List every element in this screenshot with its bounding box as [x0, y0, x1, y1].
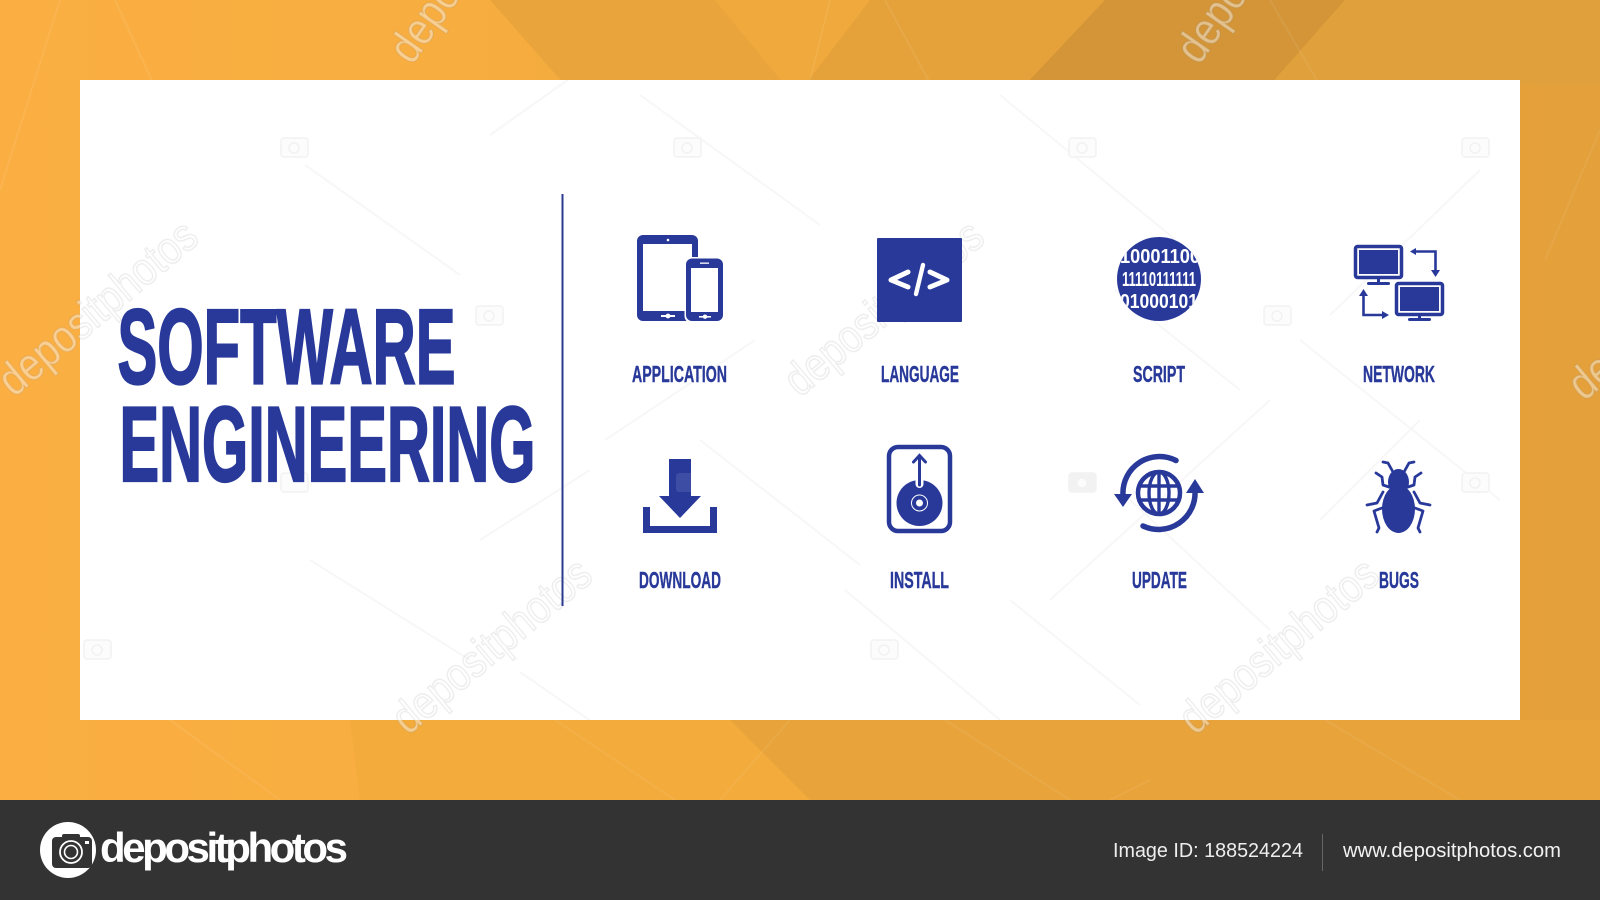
logo: depositphotos [40, 822, 348, 878]
icon: application devices [637, 235, 724, 323]
icon: script binary circle: 11110111111 [1122, 269, 1196, 291]
label: script: SCRIPT [1133, 361, 1185, 387]
title: ENGINEERING [120, 384, 536, 504]
footer bar [0, 800, 1600, 900]
label: language: LANGUAGE [881, 361, 959, 387]
title [118, 286, 536, 504]
icon: install disk [889, 447, 950, 531]
icon: script binary circle: 10001100 [1120, 246, 1200, 268]
watermark text: depositphotos [773, 209, 993, 406]
logo: depositphotos: depositphotos [100, 824, 348, 871]
divider [562, 194, 564, 606]
white panel [80, 80, 1520, 720]
website: www.depositphotos.com [1342, 839, 1561, 862]
icon: network computers [1356, 246, 1442, 321]
label: network: NETWORK [1363, 361, 1435, 387]
watermark text: depositphotos [1168, 547, 1388, 744]
icon: script binary circle: 01000101 [1120, 291, 1198, 313]
title: SOFTWARE [118, 286, 456, 406]
watermark cameras [84, 138, 1489, 659]
label: update: UPDATE [1132, 567, 1187, 593]
label: bugs: BUGS [1379, 567, 1419, 593]
label: application: APPLICATION [632, 361, 727, 387]
image id: Image ID: 188524224 [1113, 839, 1303, 862]
watermark text: depositphotos [381, 547, 601, 744]
icon: script binary circle [1117, 237, 1201, 321]
icon: download arrow tray [643, 459, 717, 533]
icon: bug [1367, 462, 1430, 533]
label: download: DOWNLOAD [639, 567, 721, 593]
label: install: INSTALL [890, 567, 949, 593]
icon: language code square [877, 238, 962, 322]
icon: update globe [1114, 457, 1204, 529]
